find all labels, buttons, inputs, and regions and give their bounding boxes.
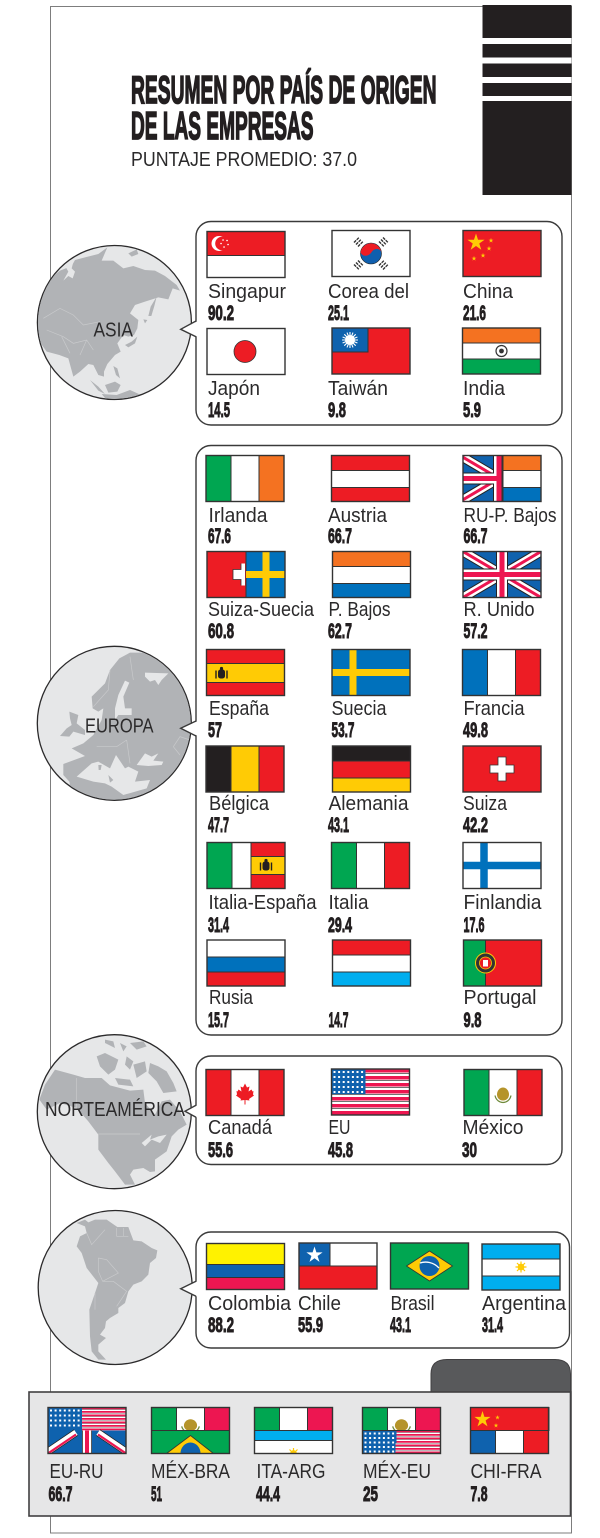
country: China xyxy=(463,230,541,325)
country: Italia: 29.4 xyxy=(328,914,352,937)
country: EU xyxy=(328,1069,410,1162)
country: P. Bajos: 62.7 xyxy=(328,620,352,643)
country: Bélgica: 47.7 xyxy=(208,814,229,837)
country: Canadá xyxy=(206,1070,284,1162)
country: Suiza: 42.2 xyxy=(463,814,488,837)
pair: CHI-FRA: 7.8 xyxy=(470,1483,488,1506)
pair: ITA-ARG xyxy=(254,1408,332,1506)
country: R. Unido xyxy=(463,552,541,643)
country: Brasil: 43.1 xyxy=(390,1314,411,1337)
country: Canadá: 55.6 xyxy=(208,1139,233,1162)
pair: MÉX-BRA: MÉX-BRA xyxy=(151,1460,231,1483)
pair: ITA-ARG: 44.4 xyxy=(256,1483,280,1506)
country: Taiwán: Taiwán xyxy=(328,378,388,400)
country: RU-P. Bajos: 66.7 xyxy=(464,525,488,548)
pair: CHI-FRA: CHI-FRA xyxy=(470,1461,542,1483)
globe: Sudamérica xyxy=(38,1210,192,1364)
country: Colombia: 88.2 xyxy=(208,1314,234,1337)
country: Italia-España: 31.4 xyxy=(208,914,229,937)
country: Argentina xyxy=(482,1244,567,1337)
country: Brasil: Brasil xyxy=(390,1293,434,1315)
country: Italia-España xyxy=(207,842,317,937)
country: Francia xyxy=(462,650,540,742)
country: P. Bajos xyxy=(328,552,410,643)
country: Austria xyxy=(328,456,410,548)
country: Rusia xyxy=(207,940,285,1032)
country: Portugal xyxy=(464,940,542,1032)
pair: EU-RU: 66.7 xyxy=(48,1483,72,1506)
pair: CHI-FRA xyxy=(470,1408,549,1506)
panel: Asia countries xyxy=(181,222,562,425)
country: RU-P. Bajos xyxy=(460,456,556,548)
country: Francia: 49.8 xyxy=(463,719,488,742)
country: Singapur: 90.2 xyxy=(208,302,234,325)
country: Italia-España: Italia-España xyxy=(208,892,317,914)
panel: Europa countries xyxy=(181,446,562,1035)
country: Francia: Francia xyxy=(464,698,525,720)
country: Corea del: 25.1 xyxy=(328,302,349,325)
country: Finlandia: Finlandia xyxy=(464,892,542,914)
country: China: China xyxy=(463,281,514,303)
country: Alemania xyxy=(328,746,410,837)
country: Rusia: 15.7 xyxy=(208,1009,229,1032)
title xyxy=(131,68,436,148)
country: P. Bajos: P. Bajos xyxy=(328,599,390,621)
header decoration: black striped block xyxy=(482,5,572,195)
country: unnamed striped flag: 14.7 xyxy=(328,1009,348,1032)
country: RU-P. Bajos: RU-P. Bajos xyxy=(464,505,556,527)
country: Portugal: Portugal xyxy=(464,987,536,1009)
country: EU: EU xyxy=(328,1117,350,1139)
country: Suiza-Suecia: 60.8 xyxy=(208,620,234,643)
globe: Europa xyxy=(37,646,203,803)
country: Chile: 55.9 xyxy=(298,1314,323,1337)
country: Irlanda: 67.6 xyxy=(208,525,231,548)
country: Corea del xyxy=(328,230,410,325)
country: Singapur: Singapur xyxy=(208,281,286,303)
country: Corea del: Corea del xyxy=(328,281,409,303)
country: Suiza: Suiza xyxy=(463,793,508,815)
country: unnamed striped flag xyxy=(328,940,410,1032)
pair: EU-RU xyxy=(48,1408,126,1506)
country: Suiza-Suecia: Suiza-Suecia xyxy=(208,599,315,621)
country: Suecia: Suecia xyxy=(332,698,387,720)
country: India xyxy=(462,328,540,422)
country: Argentina: Argentina xyxy=(482,1293,567,1315)
panel: country pairs xyxy=(29,1392,570,1516)
country: Suecia: 53.7 xyxy=(332,719,354,742)
country: Colombia xyxy=(206,1244,292,1337)
country: Austria: Austria xyxy=(328,505,388,527)
country: Bélgica: Bélgica xyxy=(209,793,270,815)
country: Rusia: Rusia xyxy=(209,987,254,1009)
country: Japón: 14.5 xyxy=(208,399,230,422)
country: Japón xyxy=(207,328,285,422)
country: Colombia: Colombia xyxy=(208,1293,292,1315)
pair: MÉX-EU: MÉX-EU xyxy=(363,1460,431,1483)
country: India: India xyxy=(463,378,506,400)
country: India: 5.9 xyxy=(463,399,481,422)
country: China: 21.6 xyxy=(463,302,486,325)
tab: dark grey xyxy=(431,1360,570,1393)
panel: Sudamérica countries xyxy=(181,1232,569,1348)
country: Taiwán: 9.8 xyxy=(328,399,346,422)
country: Portugal: 9.8 xyxy=(464,1009,482,1032)
country: Italia: Italia xyxy=(328,892,369,914)
title: DE LAS EMPRESAS xyxy=(131,105,314,148)
pair: MÉX-BRA: 51 xyxy=(151,1483,162,1506)
country: Alemania: Alemania xyxy=(328,793,409,815)
country: Canadá: Canadá xyxy=(208,1117,273,1139)
country: Finlandia: 17.6 xyxy=(464,914,484,937)
country: Chile: Chile xyxy=(298,1293,341,1315)
country: México: México xyxy=(462,1117,524,1139)
globe: Asia xyxy=(35,246,191,402)
country: R. Unido: R. Unido xyxy=(464,599,534,621)
country: Chile xyxy=(298,1243,377,1337)
pair: EU-RU: EU-RU xyxy=(50,1461,104,1483)
country: Irlanda xyxy=(206,456,284,548)
country: Argentina: 31.4 xyxy=(482,1314,503,1337)
globe label: Europa: EUROPA xyxy=(85,716,154,738)
pair: MÉX-EU xyxy=(362,1408,440,1506)
pair: ITA-ARG: ITA-ARG xyxy=(256,1461,326,1483)
pair: MÉX-BRA xyxy=(151,1408,231,1506)
globe label: Norteamérica: NORTEAMÉRICA xyxy=(45,1098,186,1121)
country: España: 57 xyxy=(208,719,222,742)
country: Suiza-Suecia xyxy=(207,552,315,643)
country: México xyxy=(462,1070,542,1162)
country: Suiza xyxy=(463,746,541,837)
country: Italia xyxy=(328,842,410,937)
country: Suecia xyxy=(332,650,410,742)
country: Japón: Japón xyxy=(208,378,260,400)
country: España: España xyxy=(209,698,270,720)
country: Austria: 66.7 xyxy=(328,525,352,548)
country: Alemania: 43.1 xyxy=(328,814,349,837)
pair: MÉX-EU: 25 xyxy=(363,1483,378,1506)
country: Finlandia xyxy=(463,842,542,937)
country: México: 30 xyxy=(462,1139,477,1162)
panel: Norteamérica countries xyxy=(185,1056,562,1164)
country: España xyxy=(206,650,284,742)
country: EU: 45.8 xyxy=(328,1139,353,1162)
country: Bélgica xyxy=(206,746,284,837)
country: Brasil xyxy=(390,1243,468,1337)
globe label: Asia: ASIA xyxy=(94,320,134,342)
country: Singapur xyxy=(207,232,286,325)
country: R. Unido: 57.2 xyxy=(464,620,488,643)
country: Irlanda: Irlanda xyxy=(208,505,268,527)
subtitle: average score: PUNTAJE PROMEDIO: 37.0 xyxy=(131,148,357,171)
country: Taiwán xyxy=(328,328,410,422)
globe: Norteamérica xyxy=(37,1035,191,1189)
